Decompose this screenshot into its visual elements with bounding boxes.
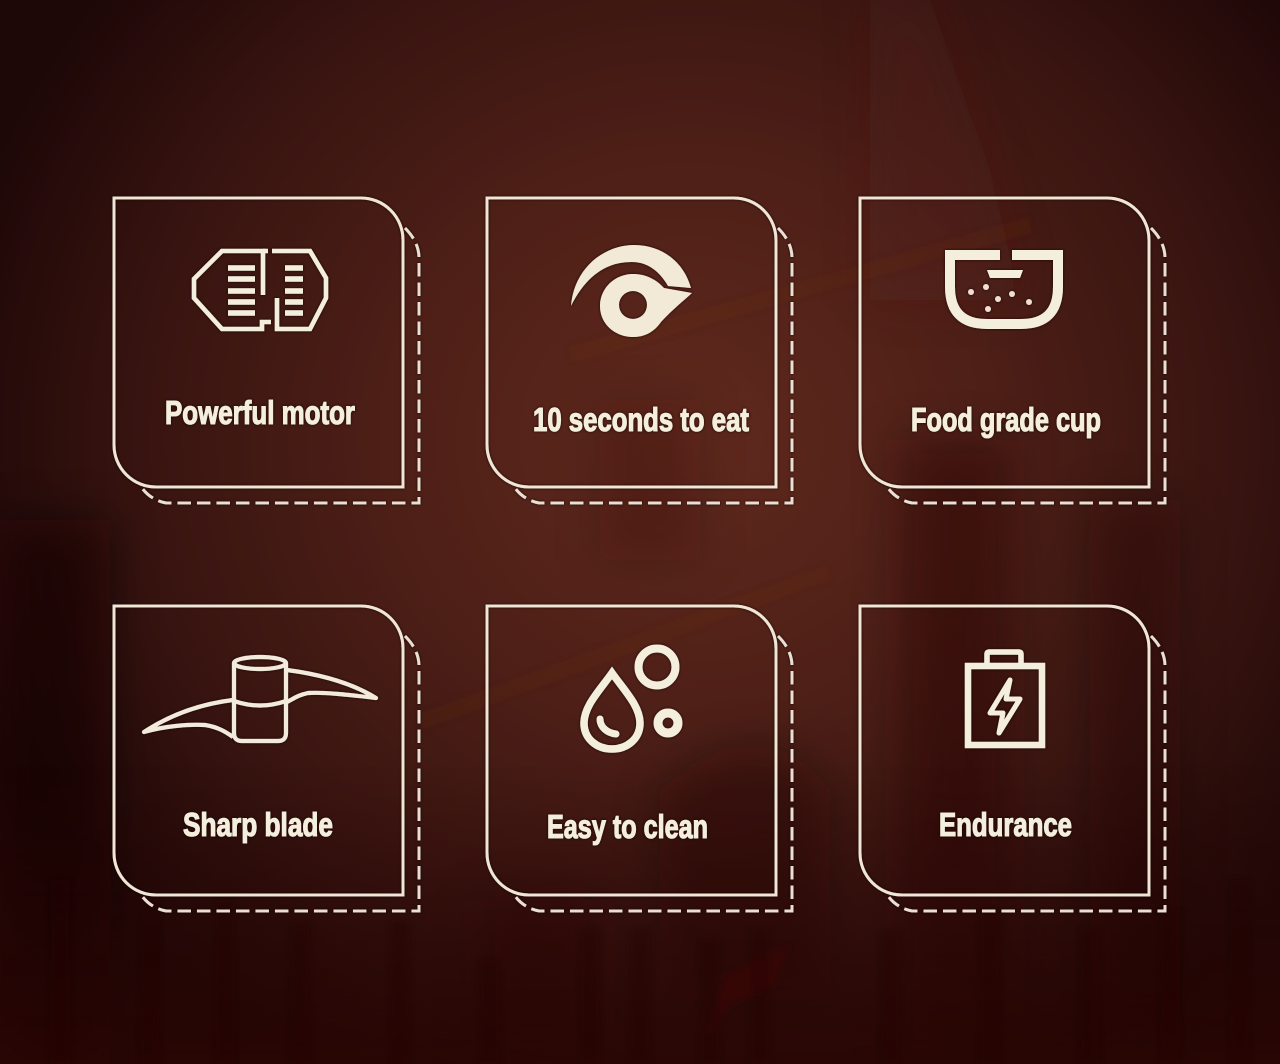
panel: easy to clean — [487, 606, 792, 911]
icon: blade — [144, 657, 376, 741]
icon: eye — [571, 245, 692, 337]
icon: cup — [950, 255, 1058, 324]
panel: sharp blade — [114, 606, 419, 911]
heading: easy to clean: Easy to clean — [547, 808, 708, 845]
panel: food grade cup — [860, 198, 1165, 503]
icon: battery — [968, 652, 1042, 745]
panel: endurance — [860, 606, 1165, 911]
panel: powerful motor — [114, 198, 419, 503]
heading: endurance: Endurance — [939, 806, 1072, 843]
icon: water drop and bubbles — [584, 648, 678, 749]
icon: motor — [194, 251, 326, 329]
heading: powerful motor: Powerful motor — [165, 394, 355, 431]
heading: 10 seconds to eat: 10 seconds to eat — [533, 401, 749, 438]
heading: food grade cup: Food grade cup — [911, 401, 1101, 438]
heading: sharp blade: Sharp blade — [183, 806, 333, 843]
panel: 10 seconds to eat — [487, 198, 792, 503]
